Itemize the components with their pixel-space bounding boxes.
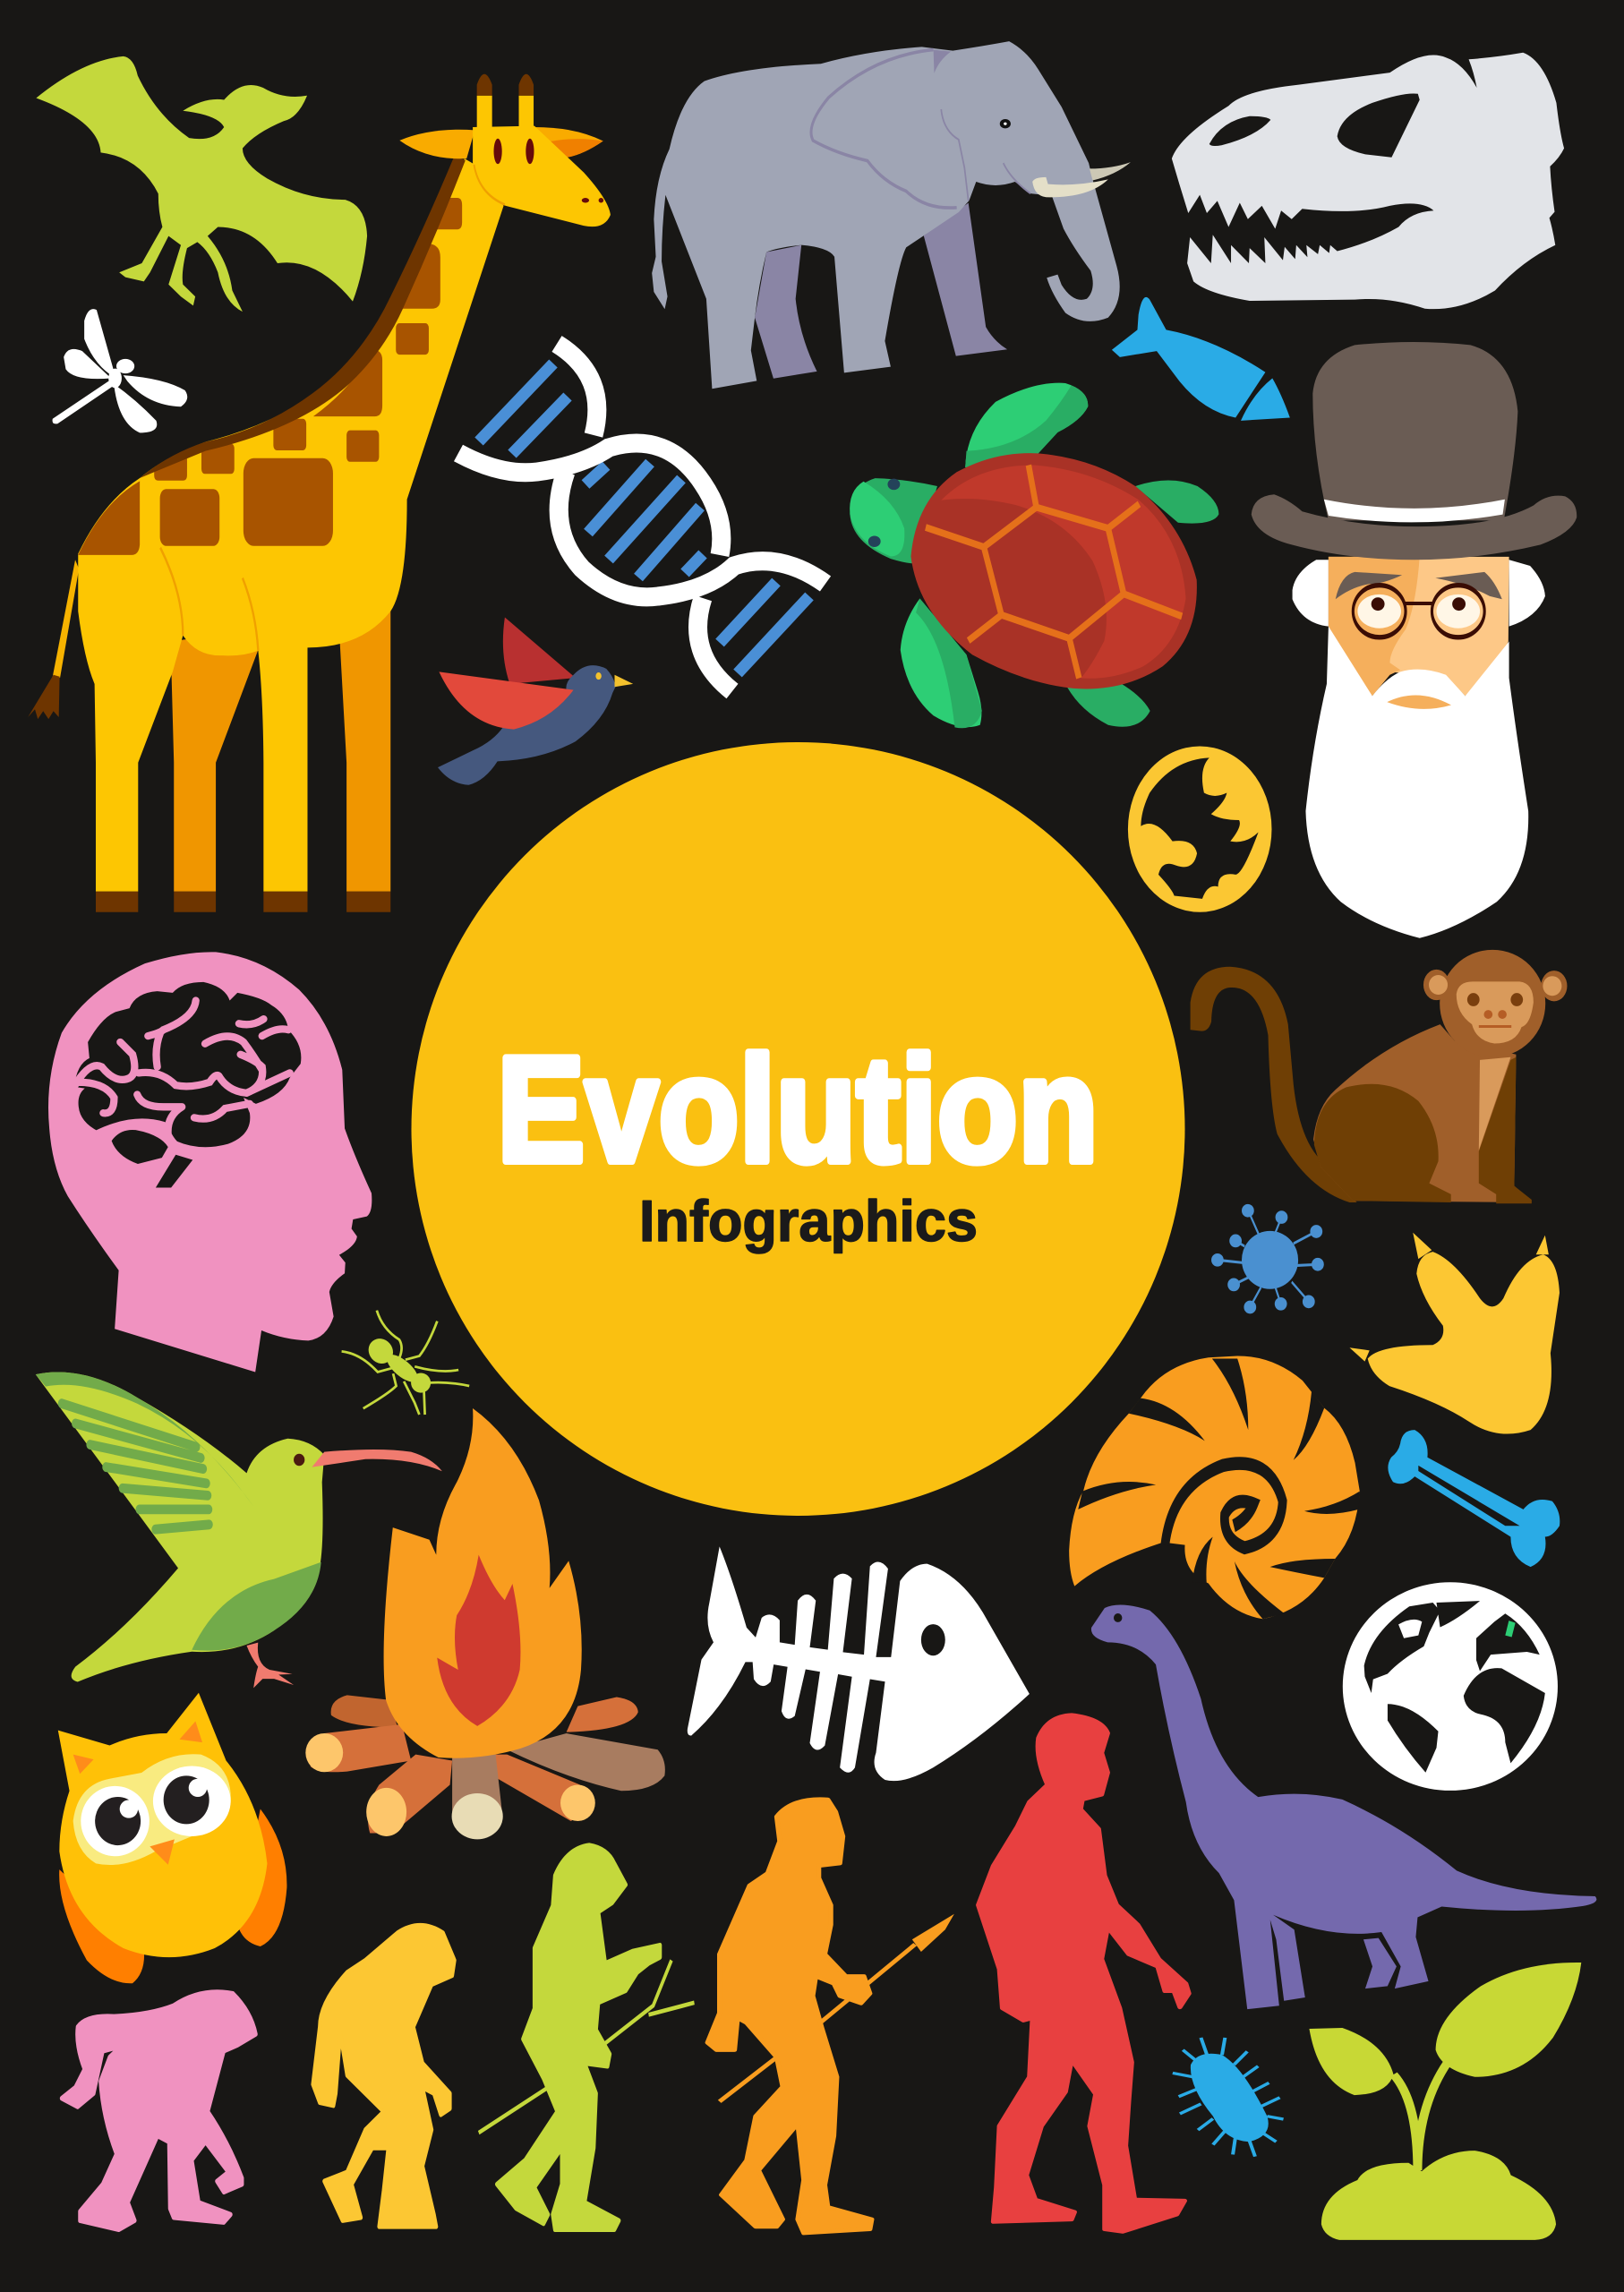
- brows: [1336, 572, 1502, 599]
- silhouette: hominid with branch: [479, 1845, 695, 2229]
- icon: turtle: [850, 383, 1218, 728]
- body and near legs: [78, 158, 504, 892]
- eyes and nostrils: [493, 139, 603, 202]
- ear and folds: [811, 50, 957, 208]
- icon: dragonfly: [53, 309, 187, 432]
- icon: elephant: [652, 41, 1131, 389]
- silhouette: stooped hominid: [312, 1926, 455, 2227]
- mane: [140, 156, 466, 478]
- subtitle: Infographics: [639, 1188, 978, 1253]
- muscle lines: [160, 548, 258, 651]
- strands: [458, 344, 825, 691]
- tusks: [1090, 162, 1131, 180]
- patches: [78, 198, 462, 555]
- icon: ammonite fossil: [1069, 1356, 1360, 1619]
- icon: monkey: [1191, 950, 1567, 1203]
- head: [473, 126, 611, 227]
- beard: [1305, 627, 1528, 938]
- brain: [74, 982, 301, 1147]
- icon: virus: [1211, 1204, 1324, 1313]
- silhouette: early ape: [62, 1992, 256, 2229]
- glasses: [1353, 586, 1484, 637]
- icon: bone: [1388, 1430, 1560, 1567]
- silhouette: modern human: [979, 1715, 1189, 2232]
- icon: human head with brain: [48, 952, 372, 1372]
- icon: hummingbird: [36, 1372, 442, 1688]
- icon: campfire: [305, 1408, 665, 1839]
- icon: fish skeleton: [688, 1546, 1030, 1781]
- logs: [331, 1695, 397, 1727]
- tail: [53, 560, 79, 678]
- icon: blue fish: [1112, 297, 1290, 421]
- icon: dinosaur skull: [1172, 53, 1564, 309]
- icon: sprouting plant: [1309, 1963, 1581, 2240]
- icon: pterosaur: [36, 56, 367, 312]
- central title circle: [412, 742, 1185, 1516]
- ears: [1423, 970, 1449, 1000]
- icon: Charles Darwin portrait: [1252, 342, 1577, 938]
- icon: giraffe: [28, 74, 611, 912]
- icon: bird: [438, 618, 633, 785]
- horns: [477, 96, 534, 127]
- shell plates: [926, 465, 1182, 678]
- icon: ant: [342, 1311, 469, 1415]
- icon: owl: [58, 1693, 286, 1983]
- shell: [910, 453, 1197, 688]
- top hat: [1312, 342, 1517, 520]
- icon: globe: [1343, 1582, 1558, 1791]
- face: [1329, 557, 1509, 696]
- icon: DNA helix: [458, 344, 825, 691]
- icon: sauropod dinosaur: [1091, 1604, 1596, 2009]
- far legs: [171, 593, 390, 892]
- silhouette: hunter with spear: [707, 1800, 954, 2233]
- hooves: [96, 892, 390, 912]
- base pairs: [479, 363, 809, 673]
- icon: dinosaur footprint: [1349, 1233, 1560, 1434]
- icon: cracked egg: [1128, 747, 1271, 912]
- side hair: [1293, 560, 1545, 627]
- title: Evolution: [497, 1025, 1098, 1193]
- eye: [1000, 119, 1011, 128]
- head: [850, 478, 937, 563]
- flippers: [965, 383, 1088, 467]
- wing feathers: [36, 1372, 253, 1507]
- flames: [384, 1408, 582, 1758]
- face: [1457, 981, 1534, 1044]
- icon: bacterium: [1173, 2038, 1284, 2157]
- ears: [399, 130, 474, 158]
